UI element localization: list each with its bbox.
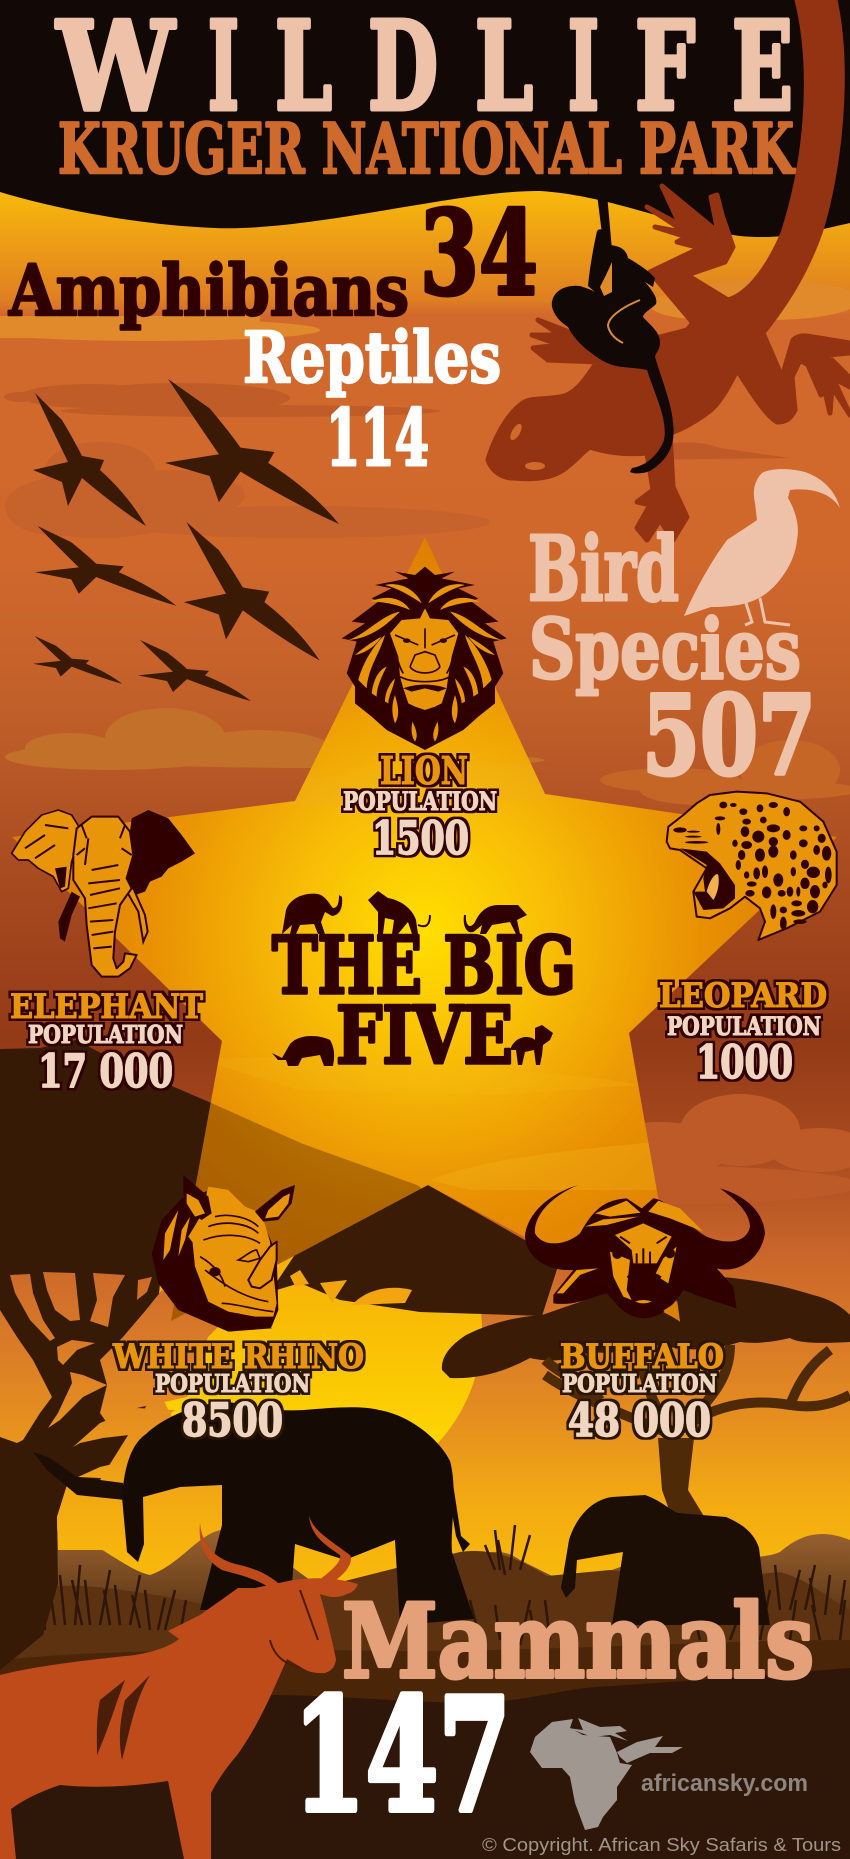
big star <box>12 537 837 1321</box>
ground <box>0 1640 850 1859</box>
label: leopard: 1000 <box>696 1035 793 1089</box>
lizard silhouette <box>488 0 850 540</box>
tree canopy: central acacia <box>270 1185 560 1316</box>
label: white rhino: POPULATION <box>155 1369 310 1398</box>
label: leopard <box>659 976 827 1089</box>
lizard eye spots <box>508 422 545 470</box>
label: elephant: POPULATION <box>28 1020 183 1049</box>
antelope <box>0 1515 358 1859</box>
stat: reptiles: 114 <box>326 393 429 484</box>
label: buffalo: POPULATION <box>562 1369 717 1398</box>
heading: the big five: FIVE <box>336 989 513 1082</box>
grass tufts <box>40 1525 845 1645</box>
label: white rhino <box>112 1337 364 1447</box>
stat: amphibians <box>8 186 538 332</box>
icon: elephant head <box>12 810 195 977</box>
heading: the big five: THE BIG <box>272 919 576 1012</box>
clouds <box>0 280 850 1205</box>
label: buffalo: 48 000 <box>568 1393 711 1447</box>
label: buffalo: BUFFALO <box>560 1337 724 1377</box>
icon: buffalo head <box>525 1185 765 1322</box>
label: lion: POPULATION <box>343 787 497 816</box>
label: lion <box>343 748 497 865</box>
stat: mammals <box>293 1582 814 1847</box>
label: elephant <box>10 987 203 1098</box>
monkey on rope <box>552 194 674 473</box>
title: WILDLIFE <box>55 0 793 138</box>
logo: africa and planes <box>530 1718 683 1830</box>
stat: mammals: 147 <box>293 1664 511 1847</box>
label: leopard: LEOPARD <box>659 976 827 1016</box>
stat: bird species <box>528 516 816 800</box>
label: elephant: ELEPHANT <box>10 987 203 1027</box>
tree canopy: left hill <box>0 1040 440 1670</box>
heading: the big five <box>272 919 576 1082</box>
sun <box>148 1163 482 1497</box>
cloud light on star <box>200 764 680 1190</box>
header wave <box>0 0 850 237</box>
icon: leopard head <box>667 792 837 940</box>
hornbill silhouette <box>684 469 840 625</box>
icon: mini animals <box>272 891 553 1066</box>
tree branches: sky gaps in left tree <box>0 1272 220 1550</box>
copyright: © Copyright. African Sky Safaris & Tours <box>482 1835 841 1855</box>
hill shaded through star <box>171 1103 422 1321</box>
background hills <box>0 1530 850 1640</box>
foreground ground <box>0 1668 850 1859</box>
white rhino icon <box>152 1175 295 1332</box>
label: white rhino: WHITE RHINO <box>112 1337 364 1377</box>
stat: reptiles: Reptiles <box>243 316 501 399</box>
label: buffalo <box>560 1337 724 1447</box>
small elephant silhouette <box>561 1495 770 1625</box>
gaps in central acacia <box>290 1270 412 1305</box>
stat: amphibians: 34 <box>420 186 538 322</box>
birds flock <box>33 379 339 701</box>
stat: bird species: Bird <box>528 516 679 621</box>
label: lion: LION <box>380 748 468 793</box>
icon: lion head <box>342 567 507 750</box>
label: lion: 1500 <box>372 811 469 865</box>
label: elephant: 17 000 <box>38 1044 173 1098</box>
stat: reptiles <box>243 316 501 484</box>
label: white rhino: 8500 <box>182 1393 283 1447</box>
big elephant silhouette <box>33 1402 474 1625</box>
stat: amphibians: Amphibians <box>8 249 409 332</box>
tree canopy: right acacia <box>442 1276 850 1378</box>
acacia trunk and branches <box>545 1345 850 1520</box>
logo text: africansky.com <box>641 1770 808 1797</box>
